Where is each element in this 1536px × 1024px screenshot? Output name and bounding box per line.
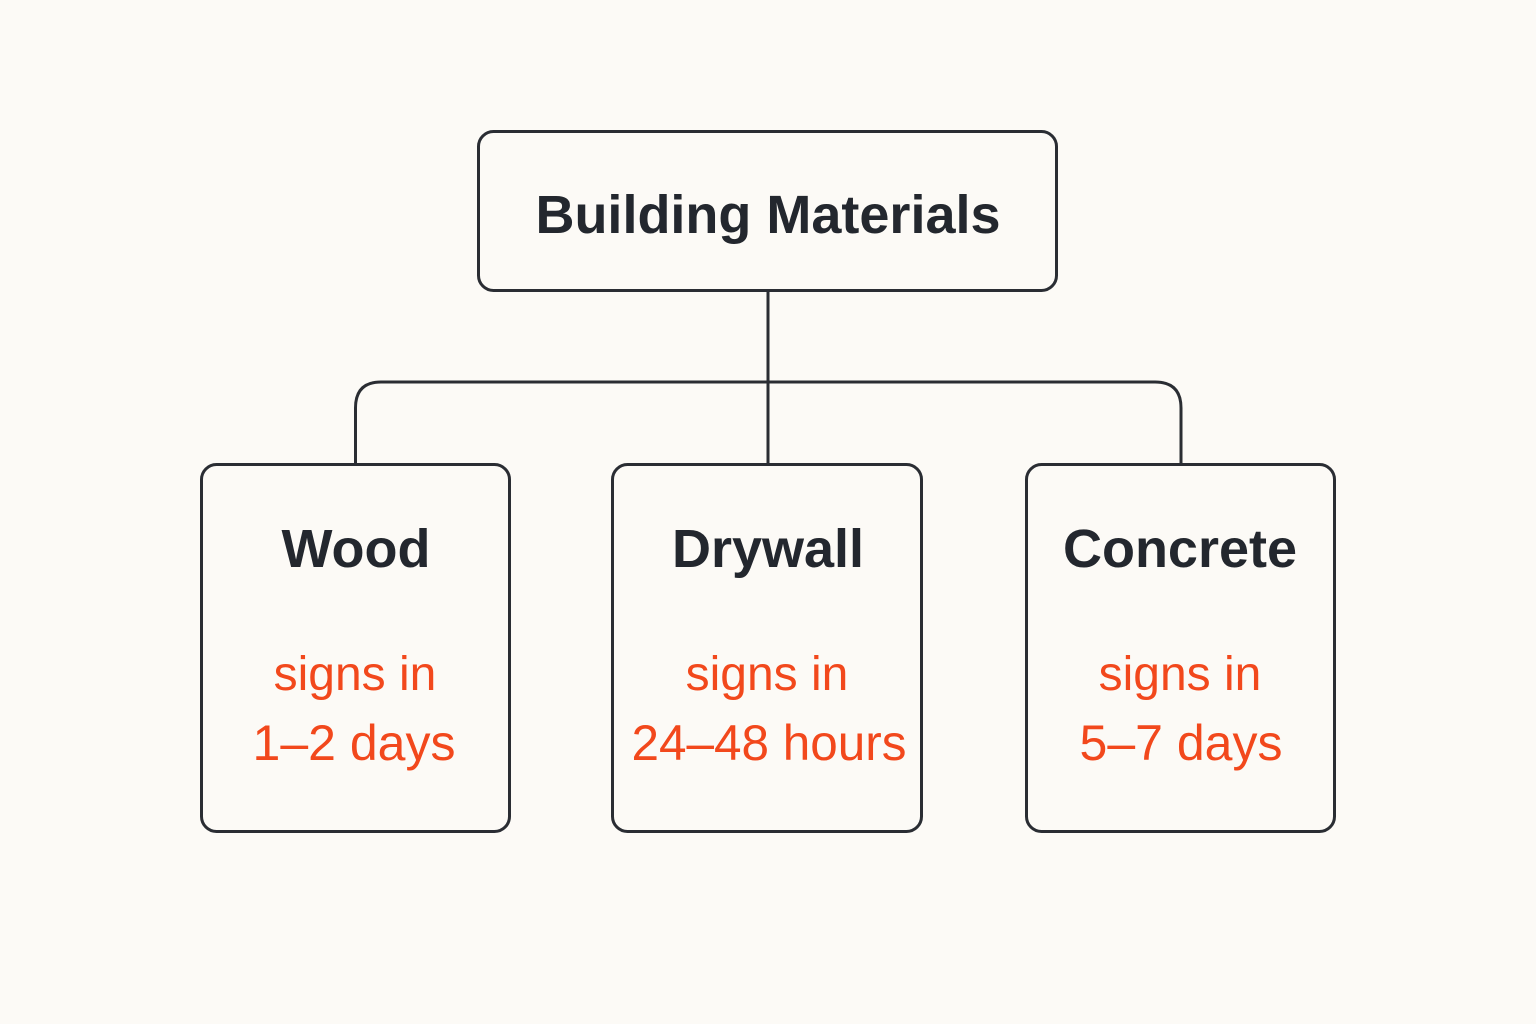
panel: wood: 1–2 days: [253, 715, 455, 771]
panel: drywall: 24–48 hours: [632, 715, 906, 771]
panel: wood: [202, 464, 510, 832]
title box: Building Materials: [535, 185, 1001, 245]
title box: [478, 132, 1056, 290]
panel: concrete: Concrete: [1063, 519, 1297, 579]
panel: concrete: signs in: [1099, 648, 1261, 701]
panel: concrete: [1026, 464, 1334, 832]
connector lines: [356, 291, 1181, 464]
panel: wood: signs in: [274, 648, 436, 701]
panel: wood: Wood: [282, 519, 430, 579]
panel: drywall: signs in: [686, 648, 848, 701]
panel: concrete: 5–7 days: [1080, 715, 1282, 771]
panel: drywall: [612, 464, 922, 832]
panel: drywall: Drywall: [672, 519, 864, 579]
